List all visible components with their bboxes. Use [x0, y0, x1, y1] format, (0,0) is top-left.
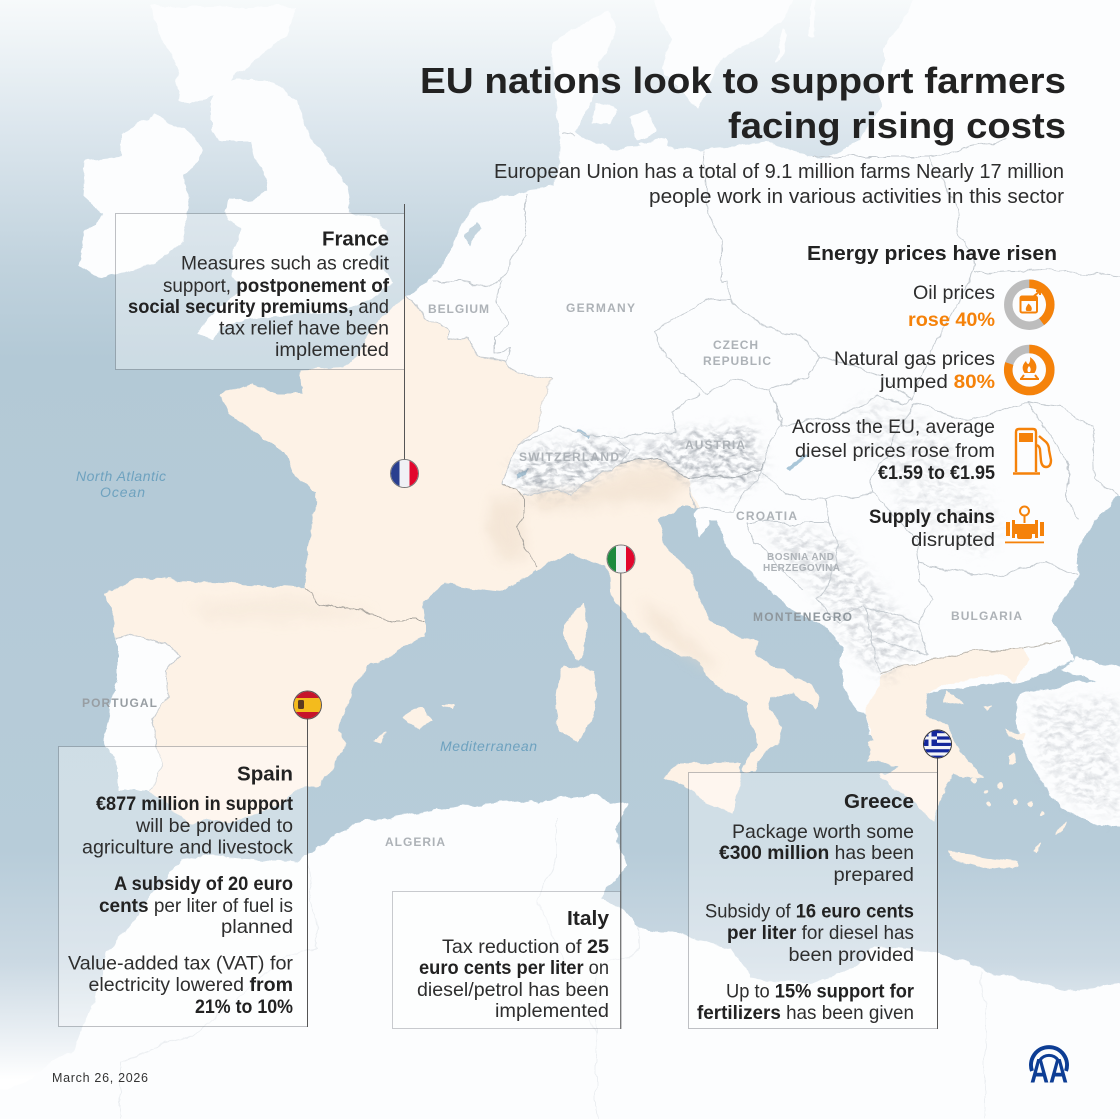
panel: Spain [58, 690, 322, 1027]
Sicily [664, 764, 742, 814]
label: Czech Republic [703, 338, 772, 368]
heading: Italy: Italy [567, 907, 610, 930]
text: Italy measures [417, 936, 609, 1022]
text: Greece package: Package worth some [732, 821, 914, 843]
label: North Atlantic Ocean: Ocean [100, 484, 145, 500]
map: country labels [76, 301, 1023, 849]
logo: Anadolu Agency: AA [1030, 1052, 1068, 1090]
land: Ireland [77, 114, 202, 279]
text: diesel prices: €1.59 to €1.95 [878, 462, 995, 484]
relief: Alps texture [510, 400, 1120, 820]
text: natural gas prices: jumped 80% [879, 371, 995, 393]
label: Germany: GERMANY [566, 301, 636, 315]
text: Spain subsidy [99, 873, 293, 938]
Crete [947, 853, 1017, 869]
map: relief shading [190, 400, 1120, 820]
text: Spain subsidy: planned [221, 916, 293, 938]
label: Bosnia and Herzegovina: HERZEGOVINA [763, 563, 841, 574]
icon: fuel pump [1013, 429, 1051, 474]
map: inland water [467, 222, 808, 479]
text: supply chains: disrupted [911, 529, 995, 551]
text: Greece subsidy [705, 900, 914, 966]
heading: Greece: Greece [844, 790, 914, 813]
panel: Greece [688, 730, 952, 1029]
date: March 26, 2026 [52, 1071, 148, 1085]
land: Sweden [643, 0, 804, 110]
text: Greece subsidy: Subsidy of 16 euro cents [705, 900, 914, 922]
label: Bosnia and Herzegovina [763, 552, 841, 574]
map: country borders [118, 133, 1120, 1119]
box: Italy [392, 892, 620, 1028]
heading: Spain: Spain [237, 762, 293, 786]
subtitle: European Union has a total of 9.1 million farms Nearly 17 million [494, 161, 1064, 183]
land: Danish islands [630, 110, 657, 140]
label: Portugal: PORTUGAL [82, 696, 158, 710]
land: Baltic islands [775, 30, 786, 62]
Balearic islands [404, 706, 432, 728]
country: Greece [864, 649, 1028, 821]
title: facing rising costs [728, 105, 1066, 146]
country: Spain [107, 578, 425, 821]
text: diesel prices: Across the EU, average [792, 416, 995, 438]
country: Italy [500, 457, 817, 771]
text: France measures: implemented [275, 339, 389, 361]
map: highlighted countries [107, 296, 1067, 869]
text: France measures: social security premiums, and [128, 296, 389, 318]
text: natural gas prices: Natural gas prices [834, 348, 995, 370]
title [420, 60, 1066, 146]
text: Greece fertilizers: Up to 15% support for [726, 980, 914, 1002]
text: Greece package: prepared [834, 864, 914, 886]
heading: France: France [322, 228, 389, 250]
label: Bulgaria: BULGARIA [951, 609, 1023, 623]
country: France [221, 296, 553, 621]
box: Spain [58, 746, 308, 1026]
text: oil prices: Oil prices [913, 282, 995, 304]
text: Greece fertilizers [697, 980, 914, 1024]
box: Greece [688, 772, 938, 1028]
text: France measures [128, 252, 390, 361]
text: Greece package: €300 million has been [719, 842, 914, 864]
label: Algeria: ALGERIA [385, 835, 446, 849]
land: European mainland [404, 0, 1120, 740]
label: Mediterranean: Mediterranean [440, 738, 537, 754]
label: North Atlantic Ocean [76, 468, 166, 500]
land: North Africa [0, 796, 1120, 1119]
label: Czech Republic: REPUBLIC [703, 354, 772, 368]
text: Spain subsidy: cents per liter of fuel is [99, 895, 293, 917]
label: North Atlantic Ocean: North Atlantic [76, 468, 166, 484]
text: Italy measures: diesel/petrol has been [417, 979, 609, 1001]
panel: Italy [392, 545, 636, 1029]
text: diesel prices: diesel prices rose from [795, 440, 995, 462]
text: Spain VAT: Value-added tax (VAT) for [68, 952, 294, 974]
text: Greece subsidy: been provided [788, 944, 914, 966]
text: Spain VAT: 21% to 10% [195, 996, 293, 1018]
flag: Spain [293, 690, 322, 720]
leader line: France [404, 204, 406, 460]
text: Italy measures: Tax reduction of 25 [442, 936, 609, 958]
label: Switzerland: SWITZERLAND [519, 450, 620, 464]
text: Spain support [82, 793, 293, 858]
text: diesel prices [792, 416, 995, 484]
Corsica [564, 603, 587, 660]
icon: gas donut 80% [1008, 349, 1050, 391]
label: Czech Republic: CZECH [713, 338, 759, 352]
flag: Italy [606, 545, 636, 574]
label: Belgium: BELGIUM [428, 302, 490, 316]
Sardinia [556, 664, 596, 742]
text: natural gas prices [834, 348, 995, 393]
text: oil prices [908, 282, 995, 331]
text: Italy measures: implemented [495, 1000, 609, 1022]
leader line: Spain [306, 719, 308, 1027]
land: Turkey [1017, 658, 1120, 830]
logo: Anadolu Agency [1030, 1047, 1068, 1090]
label: Montenegro: MONTENEGRO [753, 610, 853, 624]
panel: energy prices [792, 242, 1057, 551]
text: Spain support: €877 million in support [96, 793, 293, 815]
text: Greece subsidy: per liter for diesel has [727, 922, 914, 944]
text: France measures: Measures such as credit [181, 252, 390, 274]
text: Spain support: will be provided to [135, 815, 293, 837]
subtitle [494, 161, 1064, 208]
label: Austria: AUSTRIA [685, 438, 746, 452]
subtitle: people work in various activities in this sector [649, 186, 1064, 208]
text: France measures: tax relief have been [219, 318, 389, 340]
Greek islands [1056, 822, 1067, 835]
text: supply chains [869, 506, 995, 551]
text: Spain VAT [68, 952, 294, 1018]
land: Portugal [104, 635, 182, 789]
flag: France [390, 459, 420, 488]
leader line: Italy [620, 573, 622, 1029]
panel: France [116, 204, 420, 488]
heading: energy prices: Energy prices have risen [807, 242, 1057, 265]
leader line: Greece [936, 758, 938, 1029]
box: France [116, 214, 404, 370]
text: Spain VAT: electricity lowered from [88, 974, 293, 996]
land: Great Britain [152, 7, 393, 339]
relief: warm mountain shading [190, 465, 720, 670]
text: Spain subsidy: A subsidy of 20 euro [114, 873, 293, 895]
icon: oil donut 40% [1008, 284, 1050, 326]
text: Spain support: agriculture and livestock [82, 836, 293, 858]
text: France measures: support, postponement of [163, 275, 389, 297]
label: Bosnia and Herzegovina: BOSNIA AND [767, 552, 835, 563]
text: supply chains: Supply chains [869, 506, 995, 528]
text: Greece fertilizers: fertilizers has been given [697, 1002, 914, 1024]
text: Greece package [719, 821, 914, 886]
flag: Greece [923, 730, 952, 759]
text: Italy measures: euro cents per liter on [419, 957, 609, 979]
label: Croatia: CROATIA [736, 509, 798, 523]
title: EU nations look to support farmers [420, 60, 1066, 101]
text: oil prices: rose 40% [908, 309, 995, 331]
icon: pipeline [1005, 506, 1044, 543]
